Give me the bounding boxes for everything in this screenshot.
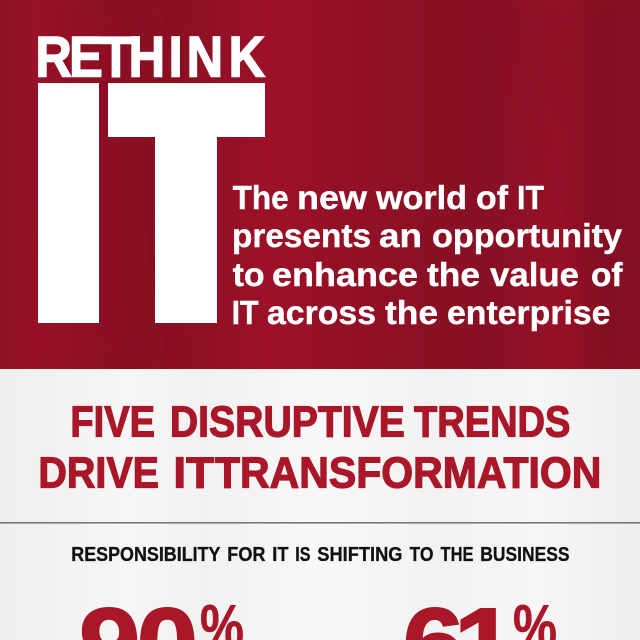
subheading: responsibility shift: TO [410,544,434,566]
text block: intro statement: new [297,179,367,216]
stat: 90 percent [82,604,243,640]
text block: intro statement: The [233,179,289,216]
text block: intro statement: an [379,217,422,254]
letter I: I [8,5,131,399]
subheading: responsibility shift: SHIFTING [317,544,402,566]
subheading: responsibility shift: RESPONSIBILITY [71,544,221,566]
heading: five disruptive trends: TRANSFORMATION [215,448,601,497]
heading: five disruptive trends: FIVE [70,397,155,446]
text block: intro statement: enhance [272,256,418,293]
text block: intro statement: of [591,256,624,293]
text block: intro statement: opportunity [432,217,623,254]
panel: light trends background [0,369,640,640]
text block: intro statement: world [375,179,467,216]
text block: intro statement: presents [232,217,371,254]
text block: intro statement [232,179,624,331]
title: RETHINK IT [38,36,266,323]
subheading: responsibility shift: IT [272,544,288,566]
heading: five disruptive trends: DISRUPTIVE [170,397,405,446]
heading: RETHINK: RETHINK [35,25,265,89]
text block: intro statement: IT [517,179,544,216]
heading: five disruptive trends: DRIVE [38,448,159,497]
heading: five disruptive trends: IT [173,448,214,497]
text block: intro statement: across [267,294,376,331]
subheading: responsibility shift: BUSINESS [480,544,570,566]
subheading: responsibility shift [71,544,570,566]
stat: 61 percent [406,604,556,640]
heading: large IT [38,83,265,323]
text block: intro statement: enterprise [447,294,610,331]
subheading: responsibility shift: IS [295,544,310,566]
heading: five disruptive trends [38,397,601,497]
letter T: T [119,39,254,366]
panel: red header background [0,0,640,369]
text block: intro statement: IT [232,294,259,331]
text block: intro statement: value [490,256,579,293]
text block: intro statement: the [385,294,438,331]
heading: five disruptive trends: TRENDS [414,397,570,446]
subheading: responsibility shift: THE [440,544,474,566]
text block: intro statement: the [427,256,480,293]
subheading: responsibility shift: FOR [227,544,266,566]
text block: intro statement: to [233,256,265,293]
text block: intro statement: of [476,179,509,216]
